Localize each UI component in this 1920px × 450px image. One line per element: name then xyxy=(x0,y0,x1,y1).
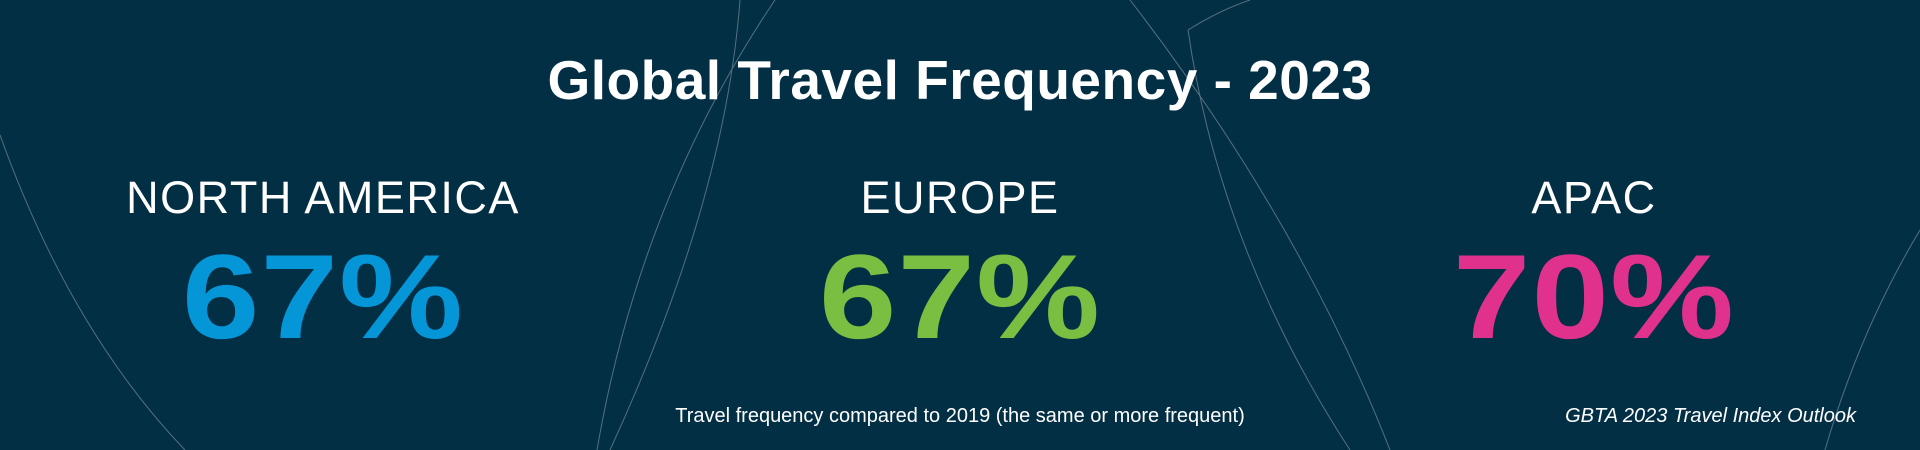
label: north america: NORTH AMERICA xyxy=(126,172,520,223)
title: Global Travel Frequency - 2023 xyxy=(547,49,1373,111)
panel: north america xyxy=(126,172,520,364)
label: europe: EUROPE xyxy=(860,172,1060,223)
number: europe: 67% xyxy=(819,230,1101,364)
panel: apac xyxy=(1453,172,1735,364)
panel: europe xyxy=(819,172,1101,364)
number: apac: 70% xyxy=(1453,230,1735,364)
label: apac: APAC xyxy=(1531,172,1657,223)
number: north america: 67% xyxy=(182,230,464,364)
source: GBTA 2023 Travel Index Outlook xyxy=(1565,405,1856,427)
footnote: Travel frequency compared to 2019 (the same or more frequent) xyxy=(675,405,1245,427)
